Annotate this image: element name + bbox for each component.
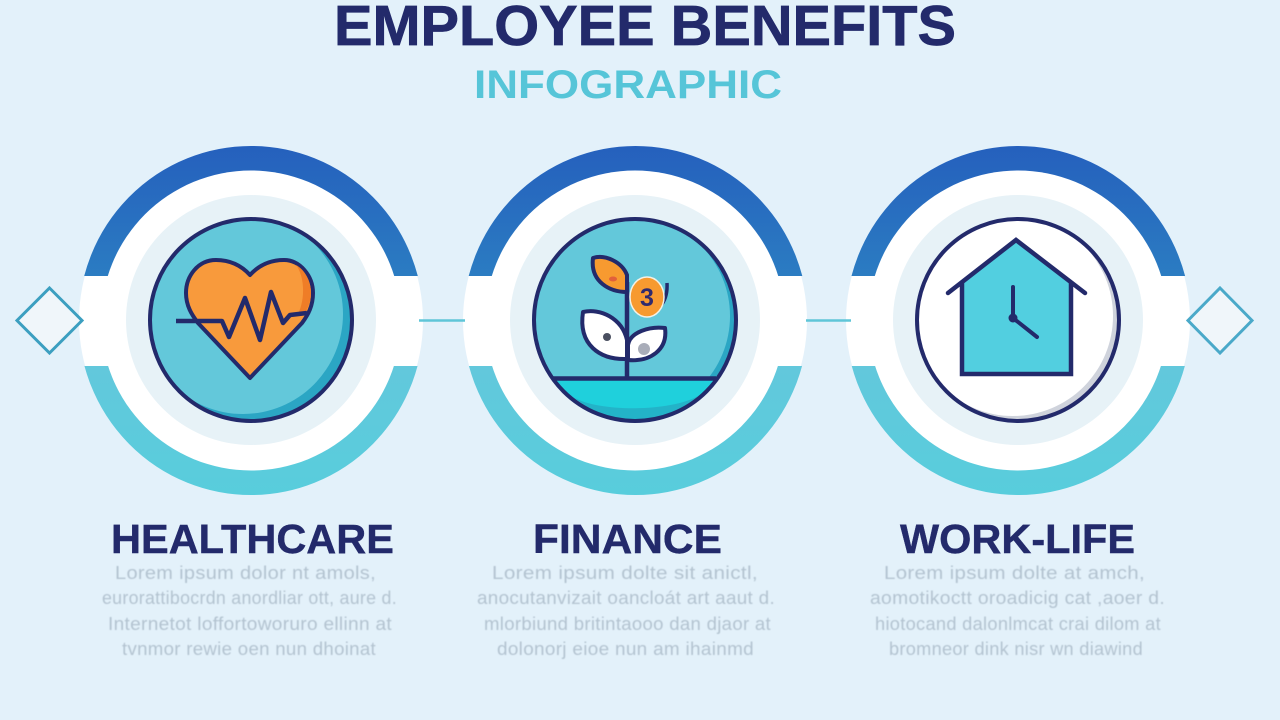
body text: Lorem ipsum dolor nt amols, (115, 563, 376, 583)
panel: healthcare (79, 148, 423, 659)
icon: growing plant with coin (530, 216, 736, 421)
inner pale ring (893, 195, 1143, 445)
body text: Lorem ipsum dolte sit anictl, (492, 563, 758, 583)
icon: growing plant with coin: 3 (640, 284, 654, 312)
body text: aomotikoctt oroadicig cat ,aoer d. (870, 588, 1165, 608)
body text: mlorbiund britintaooo dan djaor at (484, 614, 771, 634)
left diamond (17, 288, 82, 353)
panel: finance (463, 148, 807, 659)
top ring arc (468, 146, 802, 276)
body text (477, 563, 775, 659)
subtitle: INFOGRAPHIC (474, 63, 782, 107)
heading: FINANCE (533, 516, 722, 562)
body text: eurorattibocrdn anordliar ott, aure d. (102, 588, 397, 608)
top ring arc (852, 146, 1186, 276)
bottom ring arc (84, 366, 418, 495)
white disc (463, 170, 807, 470)
body text: dolonorj eioe nun am ihainmd (497, 639, 754, 659)
icon: house with clock (913, 216, 1119, 421)
body text (870, 563, 1165, 659)
connector: finance to work-life (806, 319, 851, 322)
body text (102, 563, 397, 659)
bottom ring arc (852, 366, 1185, 495)
body text: hiotocand dalonlmcat crai dilom at (875, 614, 1161, 634)
icon: heart with pulse (143, 214, 352, 421)
panel: work-life (846, 148, 1190, 659)
bottom ring arc (469, 366, 802, 495)
body text: Internetot loffortoworuro ellinn at (108, 614, 392, 634)
body text: anocutanvizait oancloát art aaut d. (477, 588, 775, 608)
top ring arc (84, 146, 418, 276)
heading: WORK-LIFE (900, 516, 1135, 562)
body text: tvnmor rewie oen nun dhoinat (122, 639, 376, 659)
white disc (846, 170, 1190, 470)
inner pale ring (126, 195, 376, 445)
inner pale ring (510, 195, 760, 445)
right diamond (1188, 288, 1252, 353)
heading: HEALTHCARE (111, 516, 394, 562)
body text: bromneor dink nisr wn diawind (889, 639, 1143, 659)
connector: healthcare to finance (419, 319, 465, 322)
body text: Lorem ipsum dolte at amch, (884, 563, 1145, 583)
white disc (79, 170, 423, 470)
